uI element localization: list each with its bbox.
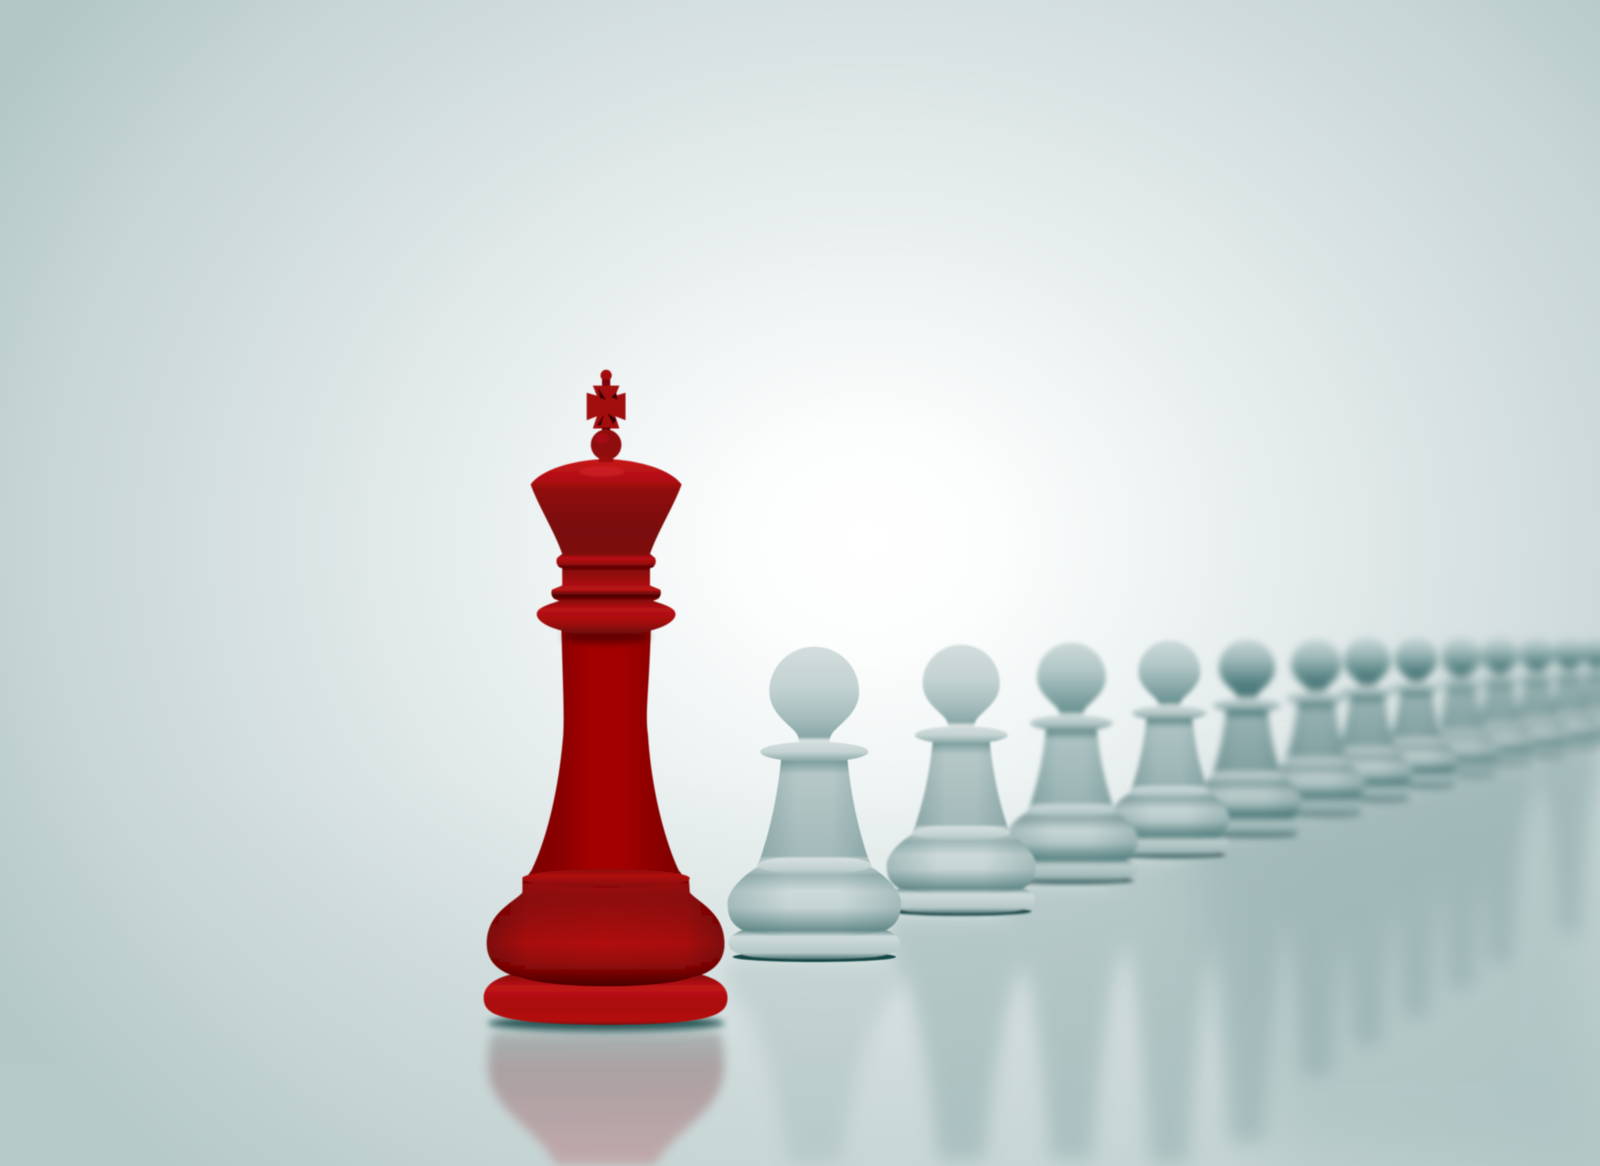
pawn: second in line [887, 645, 1036, 916]
king stem shadow [562, 629, 650, 644]
pawn: third in line [1005, 643, 1138, 884]
king bulb [487, 877, 724, 986]
king finial: cross and balls [587, 370, 626, 462]
king contact shadow [488, 1015, 724, 1031]
king shoulder lip [522, 869, 690, 888]
king crown and collars [531, 459, 682, 637]
red king chess piece [484, 370, 728, 1025]
king stem [522, 624, 689, 883]
king reflection: pink mirrored silhouette [488, 1032, 724, 1165]
pawn reflections on the glossy floor [727, 750, 1600, 1163]
far pawns: blurred row receding to the right [1110, 638, 1600, 858]
king crown highlight [580, 466, 624, 476]
pawn: nearest, beside the king [728, 647, 901, 962]
king base ring [484, 971, 728, 1025]
